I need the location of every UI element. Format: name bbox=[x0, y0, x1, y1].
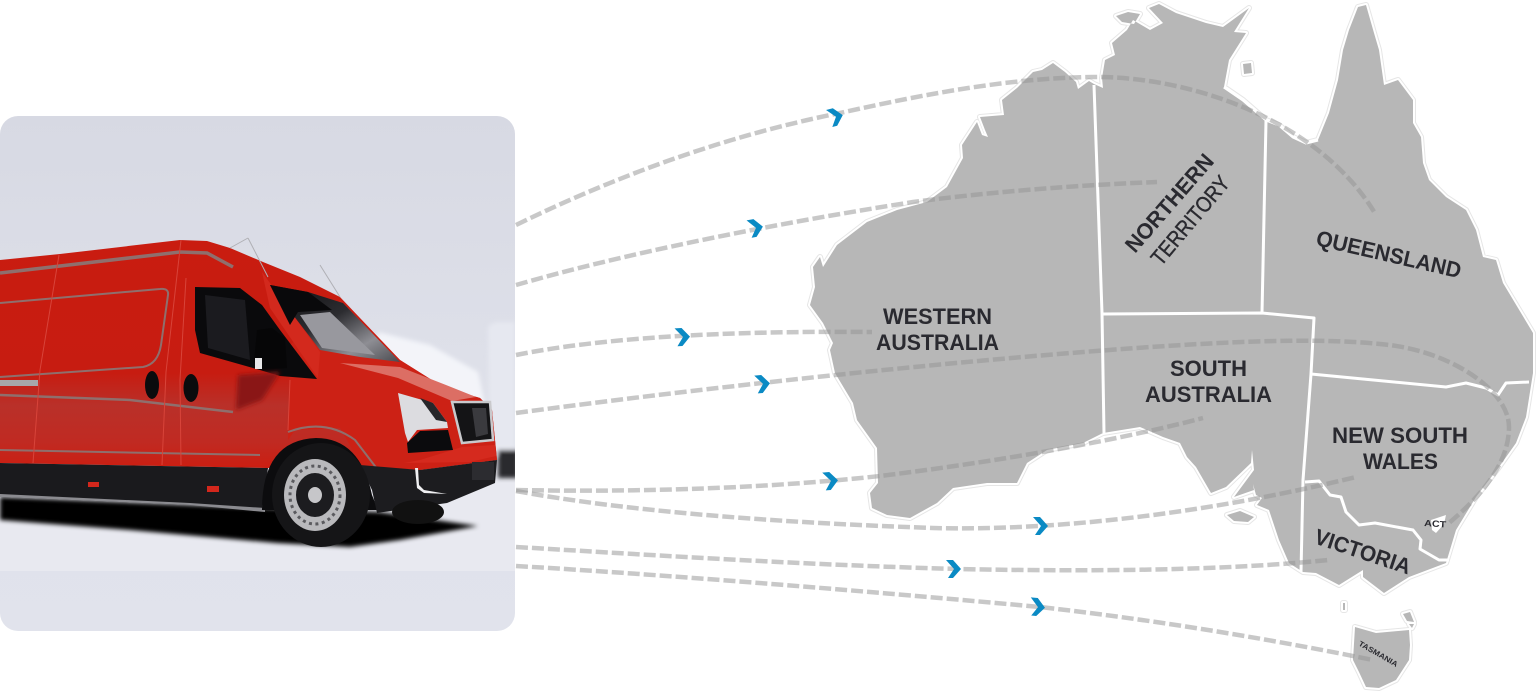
label: New South Wales: NEW SOUTH bbox=[1332, 423, 1468, 448]
antennae bbox=[230, 238, 340, 297]
radiator grille bbox=[452, 402, 493, 443]
side markers bbox=[88, 482, 99, 487]
arrow 4 bbox=[754, 374, 771, 394]
direction arrows bbox=[675, 106, 1048, 617]
floor bbox=[371, 478, 514, 512]
van bbox=[0, 238, 497, 547]
label: ACT: ACT bbox=[1424, 518, 1447, 530]
wheel arch bbox=[262, 438, 378, 510]
label: South Australia bbox=[1145, 356, 1272, 407]
label: New South Wales bbox=[1332, 423, 1468, 474]
arrow 6 bbox=[1033, 517, 1048, 535]
white van in background bbox=[377, 324, 515, 482]
windshield bbox=[270, 285, 400, 362]
route to South Australia bbox=[516, 418, 1203, 491]
state borders bbox=[1094, 85, 1529, 572]
headlight bbox=[398, 393, 448, 442]
ACT bbox=[1431, 515, 1446, 533]
route to Tasmania bbox=[516, 566, 1373, 660]
route to Victoria bbox=[516, 547, 1328, 570]
arrow 8 bbox=[1029, 597, 1046, 617]
Gulf of Carpentaria shore bbox=[1224, 87, 1318, 143]
landmass bbox=[810, 4, 1533, 688]
route to Queensland bbox=[516, 77, 1376, 225]
door handle bbox=[0, 380, 38, 386]
delivery routes bbox=[516, 77, 1509, 660]
label: Northern Territory: NORTHERN bbox=[1120, 149, 1219, 257]
arrow 5 bbox=[822, 471, 839, 491]
route to Northern Territory bbox=[516, 182, 1157, 285]
window reflections bbox=[205, 295, 250, 360]
label: New South Wales: WALES bbox=[1363, 449, 1438, 474]
wing mirror bbox=[254, 328, 287, 370]
map of Australia bbox=[810, 4, 1533, 688]
front wheel bbox=[272, 443, 370, 547]
label: Western Australia: WESTERN bbox=[883, 304, 992, 329]
label: Queensland: QUEENSLAND bbox=[1314, 226, 1464, 283]
arrow 7 bbox=[946, 560, 961, 578]
label: Western Australia: AUSTRALIA bbox=[876, 330, 999, 355]
ground shadow bbox=[0, 497, 478, 547]
panel: van photo bbox=[0, 116, 518, 631]
state labels bbox=[876, 149, 1468, 669]
lower black sill bbox=[0, 463, 268, 508]
pillar highlight bbox=[262, 273, 305, 342]
door seams bbox=[33, 240, 290, 465]
label: Western Australia bbox=[876, 304, 999, 355]
far front wheel bbox=[392, 500, 444, 524]
side window and A-pillar black bbox=[195, 287, 317, 379]
label: Tasmania: TASMANIA bbox=[1357, 639, 1400, 669]
van body bbox=[0, 240, 497, 470]
arrow 3 bbox=[675, 328, 690, 346]
route to New South Wales bbox=[516, 477, 1356, 528]
label: South Australia: AUSTRALIA bbox=[1145, 382, 1272, 407]
front panel bbox=[288, 354, 497, 470]
lower grille bbox=[407, 430, 453, 453]
mirror shadow on door bbox=[236, 372, 280, 410]
body trim lines bbox=[0, 252, 378, 470]
hood highlight bbox=[340, 363, 476, 401]
bumper bbox=[360, 460, 497, 513]
arrow 2 bbox=[747, 218, 764, 238]
route to ACT bbox=[516, 341, 1509, 523]
vents bbox=[145, 371, 159, 399]
arrow 1 bbox=[826, 106, 845, 127]
label: South Australia: SOUTH bbox=[1170, 356, 1247, 381]
route to Western Australia bbox=[516, 332, 872, 355]
label: Northern Territory: TERRITORY bbox=[1146, 170, 1235, 270]
label: Victoria: VICTORIA bbox=[1311, 524, 1414, 579]
map halo bbox=[810, 4, 1533, 688]
